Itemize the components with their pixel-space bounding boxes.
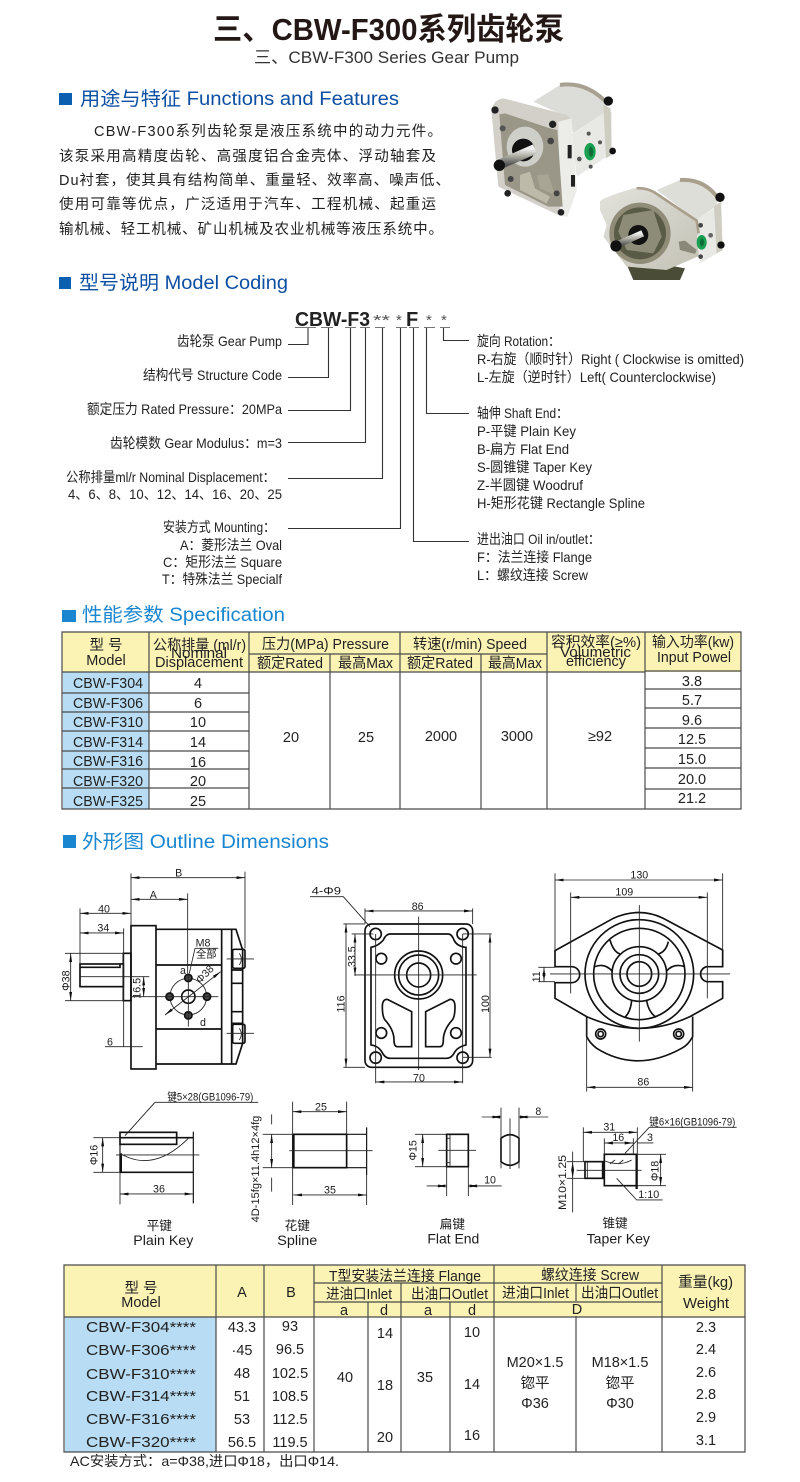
drawing: side view: 16.5 — [132, 978, 144, 999]
drawing: spline: Spline — [277, 1232, 318, 1248]
drawing: spline: 花键 — [285, 1218, 310, 1233]
dimensions table flange columns — [337, 1325, 480, 1446]
right coding labels: S-圆锥键 Taper Key — [477, 459, 592, 475]
dimensions table weight column: 2.3 — [696, 1320, 716, 1336]
drawing: side view: 34 — [97, 923, 109, 935]
right coding labels: Z-半圆键 Woodruf — [477, 477, 583, 493]
left coding labels: 齿轮泵 Gear Pump — [177, 333, 282, 349]
specification table power values: 21.2 — [678, 791, 706, 807]
specification table power values — [678, 674, 706, 807]
right coding labels: F：法兰连接 Flange — [477, 549, 592, 565]
specification table header: 输入功率(kw) — [652, 634, 734, 651]
right coding labels: P-平键 Plain Key — [477, 423, 576, 439]
dimensions table header: 螺纹连接 Screw — [541, 1267, 639, 1284]
dimensions table header: Model — [121, 1295, 161, 1311]
drawing: side view: B — [175, 867, 182, 879]
dimensions table B column: 112.5 — [272, 1412, 308, 1428]
dimensions table header: T型安装法兰连接 Flange — [329, 1268, 481, 1285]
left coding labels: C：矩形法兰 Square — [163, 554, 282, 570]
dimensions table flange columns: 40 — [337, 1370, 353, 1386]
drawing: taper key: M10×1.25 — [557, 1155, 569, 1210]
dimensions table header: 进油口Inlet — [502, 1285, 569, 1302]
drawing: flat end: 10 — [484, 1174, 496, 1186]
dimensions table A column: 51 — [234, 1389, 250, 1405]
dimensions table A column: 56.5 — [228, 1435, 256, 1451]
dimensions table screw columns: M18×1.5 — [592, 1355, 648, 1371]
dimensions table header: D — [572, 1302, 582, 1318]
dimensions table models: CBW-F314**** — [86, 1389, 196, 1405]
right coding labels: 轴伸 Shaft End： — [477, 405, 568, 421]
dimensions table B column: 108.5 — [272, 1389, 308, 1405]
specification table merged values: 20 — [283, 730, 299, 746]
drawing: flat end — [408, 1106, 548, 1247]
dimensions table models — [86, 1320, 196, 1451]
dimensions table models: CBW-F310**** — [86, 1367, 196, 1383]
footnote: AC安装方式：a=Φ38,进口Φ18，出口Φ14. — [70, 1453, 339, 1469]
model code string: F — [406, 309, 418, 331]
specification table displacement values: 20 — [190, 774, 206, 790]
dimensions table flange columns: 14 — [377, 1326, 393, 1342]
dimensions table header: a — [340, 1303, 349, 1319]
specification table header: Nominal — [171, 646, 227, 662]
left coding labels: 齿轮模数 Gear Modulus：m=3 — [110, 435, 282, 451]
drawing: side view: Φ38 — [60, 970, 72, 991]
drawing: mounting face view: 33.5 — [347, 946, 359, 967]
model code string: CBW-F3 — [295, 309, 370, 331]
dimensions table weight column: 2.6 — [696, 1365, 716, 1381]
left coding labels: 安装方式 Mounting： — [163, 519, 275, 535]
drawing: spline: 4D-15fg×11.4h12×4fg — [250, 1116, 262, 1222]
dimensions table flange columns: 16 — [464, 1428, 480, 1444]
right coding labels: B-扁方 Flat End — [477, 441, 569, 457]
drawing: plain key: 36 — [153, 1184, 165, 1196]
drawing: taper key: Φ18 — [650, 1161, 662, 1181]
left coding labels: A：菱形法兰 Oval — [180, 537, 282, 553]
drawing: spline — [250, 1101, 373, 1248]
model code string — [295, 309, 447, 331]
dimensions table A column: 53 — [234, 1412, 250, 1428]
drawing: flat end: 8 — [535, 1106, 541, 1118]
specification table power values: 12.5 — [678, 732, 706, 748]
specification table merged values: ≥92 — [588, 729, 612, 745]
dimensions table screw columns: 锪平 — [606, 1375, 634, 1392]
specification table header: 转速(r/min) Speed — [413, 636, 527, 653]
drawing: mounting face view: 4-Φ9 — [312, 886, 341, 898]
specification table displacement values — [190, 676, 206, 810]
dimensions table screw columns — [507, 1355, 648, 1412]
right coding labels: L-左旋（逆时针）Left( Counterclockwise) — [477, 369, 716, 385]
dimensions table B column: 102.5 — [272, 1366, 308, 1382]
drawing: front view: 11 — [531, 971, 543, 982]
text block: description: CBW-F300系列齿轮泵是液压系统中的动力元件。 — [94, 123, 442, 140]
section heading: outline dimensions: 外形图 Outline Dimensions — [82, 831, 329, 853]
photo: rectangular-flange gear pump — [491, 84, 616, 217]
right coding labels: L：螺纹连接 Screw — [477, 567, 589, 583]
specification table merged values — [283, 729, 612, 746]
drawing: side view: A — [150, 889, 158, 901]
dimensions table weight column: 2.9 — [696, 1410, 716, 1426]
left coding labels: 公称排量ml/r Nominal Displacement： — [66, 469, 275, 485]
specification table displacement values: 16 — [190, 755, 206, 771]
title: 三、CBW-F300系列齿轮泵 — [213, 12, 564, 47]
drawing: side view: Φ38 — [194, 963, 217, 986]
specification table models: CBW-F304 — [73, 676, 143, 692]
right coding labels: 进出油口 Oil in/outlet： — [477, 531, 600, 547]
section heading: functions and features: 用途与特征 Functions and Features — [80, 88, 399, 110]
model code string: * — [426, 312, 432, 329]
dimensions table weight column: 2.8 — [696, 1387, 716, 1403]
drawing: side view: a — [180, 965, 186, 977]
drawing: front view: 130 — [630, 870, 648, 882]
text block: description — [59, 123, 450, 238]
dimensions table B column: 93 — [282, 1319, 298, 1335]
dimensions table A column: 43.3 — [228, 1320, 256, 1336]
specification table displacement values: 10 — [190, 715, 206, 731]
right coding labels: R-右旋（顺时针）Right ( Clockwise is omitted) — [477, 351, 744, 367]
dimensions table header: a — [424, 1303, 433, 1319]
dimensions table header: d — [468, 1303, 476, 1319]
section heading: model coding: 型号说明 Model Coding — [79, 272, 288, 294]
specification table header: 最高Max — [338, 655, 394, 672]
dimensions table header: 出油口Outlet — [411, 1286, 488, 1303]
drawing: taper key — [557, 1115, 737, 1247]
drawing: side view: 全部 — [196, 948, 217, 961]
specification table power values: 20.0 — [678, 772, 706, 788]
specification table power values: 9.6 — [682, 713, 702, 729]
drawing: taper key: 16 — [612, 1132, 624, 1144]
drawing: side view — [60, 867, 254, 1069]
drawing: mounting face view: 116 — [335, 995, 347, 1012]
model code string: * — [441, 312, 447, 329]
dimensions table screw columns: M20×1.5 — [507, 1355, 563, 1371]
drawing: mounting face view — [310, 886, 492, 1085]
text block: description: 该泵采用高精度齿轮、高强度铝合金壳体、浮动轴套及 — [59, 148, 436, 165]
drawing: front view: 86 — [637, 1077, 649, 1089]
subtitle: 三、CBW-F300 Series Gear Pump — [254, 48, 519, 67]
left coding labels: T：特殊法兰 Specialf — [162, 571, 282, 587]
dimensions table header: 出油口Outlet — [581, 1285, 658, 1302]
specification table models: CBW-F306 — [73, 696, 143, 712]
model code string: ** — [373, 312, 390, 329]
drawing: taper key: 3 — [647, 1132, 653, 1144]
dimensions table flange columns: 10 — [464, 1325, 480, 1341]
dimensions table weight column: 2.4 — [696, 1342, 716, 1358]
drawing: plain key: 键5×28(GB1096-79) — [167, 1090, 253, 1103]
specification table header: efficiency — [566, 654, 627, 670]
dimensions table screw columns: Φ30 — [606, 1396, 634, 1412]
left coding labels: 额定压力 Rated Pressure：20MPa — [87, 401, 282, 417]
drawing: mounting face view: 86 — [412, 901, 424, 913]
drawing: plain key — [88, 1090, 258, 1248]
drawing: spline: 35 — [324, 1185, 336, 1197]
drawing: plain key: 平键 — [147, 1219, 172, 1233]
specification table displacement values: 25 — [190, 794, 206, 810]
dimensions table flange columns: 18 — [377, 1378, 393, 1394]
specification table header: Input Powel — [657, 650, 731, 666]
specification table models: CBW-F316 — [73, 754, 143, 770]
right coding labels — [477, 333, 744, 583]
drawing: front view: 109 — [615, 887, 633, 899]
drawing: spline: 25 — [315, 1101, 327, 1113]
specification table displacement values: 6 — [194, 696, 202, 712]
specification table displacement values: 4 — [194, 676, 202, 692]
dimensions table B column — [272, 1319, 308, 1451]
drawing: side view: d — [200, 1017, 206, 1029]
drawing: flat end: Φ15 — [408, 1140, 420, 1161]
drawing: flat end: Flat End — [427, 1231, 479, 1247]
right coding labels: 旋向 Rotation： — [477, 333, 560, 349]
drawing: mounting face view: 100 — [480, 995, 492, 1013]
dimensions table models: CBW-F306**** — [86, 1343, 196, 1359]
left coding labels — [66, 333, 282, 587]
dimensions table header — [121, 1267, 733, 1319]
drawing: taper key: 键6×16(GB1096-79) — [649, 1115, 735, 1128]
specification table header: 容积效率(≥%) — [551, 634, 641, 651]
dimensions table header: d — [380, 1303, 388, 1319]
specification table header: Model — [86, 653, 126, 669]
specification table header: 公称排量 (ml/r) — [153, 637, 246, 654]
drawing: front view — [531, 870, 730, 1092]
specification table merged values: 2000 — [425, 729, 457, 745]
drawing: mounting face view: 70 — [413, 1073, 425, 1085]
specification table header: 压力(MPa) Pressure — [262, 636, 389, 653]
table: specification — [62, 632, 741, 810]
dimensions table header: B — [286, 1285, 296, 1301]
specification table header: Volumetric — [560, 645, 631, 661]
drawing: taper key: 锥键 — [602, 1217, 628, 1231]
drawing: plain key: Φ16 — [88, 1145, 100, 1165]
specification table power values: 5.7 — [682, 693, 702, 709]
table: dimensions — [64, 1265, 745, 1452]
drawing: side view: M8 — [196, 937, 211, 949]
dimensions table screw columns: 锪平 — [520, 1375, 550, 1392]
drawing: flat end: 扁键 — [440, 1218, 465, 1232]
drawing: side view: 40 — [98, 904, 110, 916]
text block: description: Du衬套，使其具有结构简单、重量轻、效率高、噪声低、 — [59, 171, 450, 189]
dimensions table A column — [228, 1320, 256, 1451]
text block: description: 使用可靠等优点，广泛适用于汽车、工程机械、起重运 — [59, 195, 436, 213]
left coding labels: 结构代号 Structure Code — [143, 367, 282, 383]
dimensions table header: Weight — [683, 1296, 729, 1312]
drawing: side view: 6 — [107, 1036, 113, 1048]
specification table merged values: 3000 — [501, 729, 533, 745]
specification table displacement values: 14 — [190, 735, 206, 751]
specification table models — [73, 676, 143, 810]
specification table merged values: 25 — [358, 730, 374, 746]
dimensions table models: CBW-F316**** — [86, 1412, 196, 1428]
photo: oval-flange gear pump — [600, 180, 725, 280]
dimensions table flange columns: 35 — [417, 1370, 433, 1386]
dimensions table weight column — [696, 1320, 716, 1449]
text block: description: 输机械、轻工机械、矿山机械及农业机械等液压系统中。 — [59, 220, 443, 238]
dimensions table screw columns: Φ36 — [521, 1396, 549, 1412]
drawing: plain key: Plain Key — [133, 1232, 193, 1248]
specification table models: CBW-F310 — [73, 715, 143, 731]
specification table models: CBW-F320 — [73, 774, 143, 790]
specification table header: 最高Max — [488, 655, 543, 672]
dimensions table flange columns: 14 — [464, 1377, 480, 1393]
right coding labels: H-矩形花键 Rectangle Spline — [477, 495, 645, 511]
specification table header: 额定Rated — [257, 655, 323, 672]
dimensions table weight column: 3.1 — [696, 1433, 716, 1449]
specification table power values: 15.0 — [678, 752, 706, 768]
section heading: specification: 性能参数 Specification — [82, 604, 285, 626]
dimensions table header: 重量(kg) — [678, 1274, 733, 1291]
specification table header: Displacement — [155, 655, 243, 671]
model code string: * — [396, 312, 402, 329]
dimensions table A column: 48 — [234, 1366, 250, 1382]
dimensions table header: 进油口Inlet — [326, 1286, 392, 1303]
specification table header: 额定Rated — [407, 655, 473, 672]
specification table power values: 3.8 — [682, 674, 702, 690]
specification table header — [86, 634, 734, 672]
specification table models: CBW-F314 — [73, 735, 143, 751]
drawing: taper key: Taper Key — [587, 1231, 650, 1247]
dimensions table A column: ·45 — [232, 1343, 252, 1359]
dimensions table B column: 119.5 — [272, 1435, 308, 1451]
dimensions table models: CBW-F320**** — [86, 1435, 196, 1451]
drawing: taper key: 31 — [603, 1121, 615, 1133]
dimensions table header: 型 号 — [124, 1280, 158, 1297]
dimensions table header: A — [237, 1285, 247, 1301]
left coding labels: 4、6、8、10、12、14、16、20、25 — [68, 486, 282, 502]
specification table models: CBW-F325 — [73, 794, 143, 810]
specification table header: 型 号 — [89, 637, 123, 654]
dimensions table flange columns: 20 — [377, 1430, 393, 1446]
dimensions table B column: 96.5 — [276, 1342, 304, 1358]
connector lines for model code — [288, 328, 469, 542]
dimensions table models: CBW-F304**** — [86, 1320, 196, 1336]
drawing: taper key: 1:10 — [638, 1189, 659, 1201]
